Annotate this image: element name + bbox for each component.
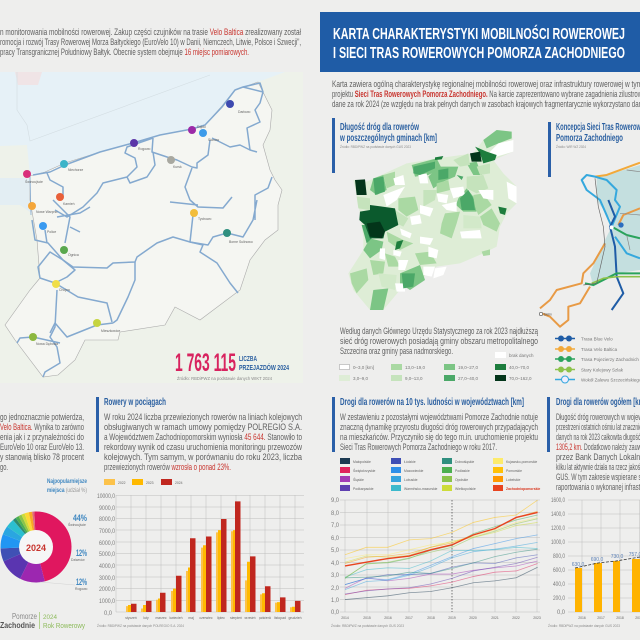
intro text: bicycle monitoring: romocja i rozwój Trasy Rowerowej Morza Bałtyckiego (EuroVelo 10) w Danii, Niemczech, Litwie, Polsce i Szwecji", xyxy=(0,37,301,47)
bar chart: bikes on trains by month: lipiec xyxy=(217,616,225,620)
choropleth legend: 40,0–70,0 xyxy=(509,365,530,370)
choropleth map xyxy=(348,130,517,310)
bar chart: bikes on trains by month: 1000,0 xyxy=(99,599,116,605)
logo: Pomorze Zachodnie 2024 Rok Rowerowy xyxy=(0,612,85,630)
bar chart: bikes on trains by month: październik xyxy=(259,616,271,620)
logo: Pomorze Zachodnie 2024 Rok Rowerowy: Zachodnie xyxy=(0,621,35,630)
line chart: voivodeships: 2020 xyxy=(469,616,477,620)
place labels: Sianów xyxy=(208,138,220,142)
place labels: Niechorze xyxy=(68,168,83,172)
bar chart: bikes on trains by month: grudzień xyxy=(288,616,302,620)
panel: paths per 10 thousand inhabitants: na mieszkańców. Przyczyniło się do tego m.in. uruchomienie projektu xyxy=(340,432,538,442)
place labels: Mieszkowice xyxy=(101,329,120,333)
place labels: Borne Sulinowo xyxy=(229,240,253,244)
line chart legend: Mazowieckie xyxy=(404,469,424,473)
intro text: bicycle monitoring: pracy Transgranicznej Południowy Bałtyk. Obecnie system obejmuje 16 miejsc pomiarowych. xyxy=(0,47,249,57)
donut chart: share by place: 12% xyxy=(76,548,87,558)
bar chart: bikes on trains by month: 2000,0 xyxy=(99,587,116,593)
bar chart: bikes on trains by month: marzec xyxy=(155,616,167,620)
sea xyxy=(0,72,285,176)
bar chart: total km by year: 730,0 xyxy=(611,554,623,560)
intro text: bicycle monitoring xyxy=(0,27,301,57)
place labels: Kursk xyxy=(173,165,182,169)
bar chart: total km by year: 1400,0 xyxy=(551,512,565,518)
panel: length of bicycle paths by municipality: w poszczególnych gminach [km] xyxy=(339,133,437,144)
donut chart: share by place: Świnoujście xyxy=(68,522,86,527)
statistic: number of passes: LICZBA xyxy=(239,356,257,363)
line chart legend: Zachodniopomorskie xyxy=(506,487,540,491)
bar chart: bikes on trains by month: listopad xyxy=(274,616,286,620)
bar chart: bikes on trains by month: Źródło: RBDiPWZ na podstawie danych POLREGIO S.A. 2024 xyxy=(97,623,184,628)
text block: most popular places: enia jak i z przynależności do xyxy=(0,432,84,442)
bar chart: total km by year xyxy=(548,498,640,628)
bar chart: bikes on trains by month: styczeń xyxy=(125,616,137,620)
chart legend: 2022 xyxy=(118,481,126,485)
text block: most popular places: Velo Baltica. Wynika to zarówno xyxy=(0,422,84,432)
chart legend: 2024 xyxy=(175,481,183,485)
place labels: Kamień xyxy=(63,202,75,206)
bar chart: total km by year: 2017 xyxy=(597,616,605,620)
intro text: bicycle monitoring: n monitorowania mobilności rowerowej. Zakup części czujników na trasie Velo Baltica zrealizowany został xyxy=(0,27,301,37)
choropleth legend: 27,0–40,0 xyxy=(458,376,479,381)
chart legend: 2023 xyxy=(146,481,154,485)
counter markers xyxy=(23,100,234,341)
region land xyxy=(5,82,282,377)
panel: total bicycle paths xyxy=(547,397,640,492)
panel: paths per 10 thousand inhabitants xyxy=(332,397,538,452)
choropleth legend: 70,0–162,0 xyxy=(509,376,532,381)
line chart: voivodeships: 2,0 xyxy=(331,586,340,592)
line chart legend: Świętokrzyskie xyxy=(353,468,376,473)
text: statistics note: sieć dróg rowerowych posiadają gminy obszaru metropolitalnego xyxy=(340,336,538,346)
line chart: voivodeships: 2022 xyxy=(512,616,520,620)
bar chart: bikes on trains by month: wrzesień xyxy=(244,616,256,620)
bar chart: total km by year: 1600,0 xyxy=(551,498,565,504)
line chart: voivodeships: 7,0 xyxy=(331,523,340,529)
line chart legend: Dolnośląskie xyxy=(455,460,474,464)
line chart: voivodeships: 0,0 xyxy=(331,610,340,616)
donut chart: share by place: 12% xyxy=(76,577,87,587)
bar chart: bikes on trains by month: 5000,0 xyxy=(99,552,116,558)
route network map: Bielin xyxy=(544,313,552,317)
panel: bikes on trains: obsługiwanych w ramach umowy pomiędzy POLREGIO S.A. xyxy=(104,422,302,432)
place labels: Darłowo xyxy=(238,110,251,114)
line chart legend: Śląskie xyxy=(353,477,364,482)
line chart legend: Podkarpackie xyxy=(353,487,374,491)
text block: most popular places: EuroVelo 10 oraz EuroVelo 13. xyxy=(0,442,84,452)
bar chart: total km by year: Źródło: RBDiPWZ na podstawie danych GUS 2023 xyxy=(548,623,620,628)
text block: most popular places xyxy=(0,412,84,472)
panel: length of bicycle paths by municipality: Długość dróg dla rowerów xyxy=(340,122,419,133)
panel: paths per 10 thousand inhabitants: Drogi dla rowerów na 10 tys. ludności w województwach [km] xyxy=(340,397,524,408)
text block: most popular places: go. xyxy=(0,462,8,472)
donut chart: share by place: miejsca (udział %) xyxy=(47,488,87,494)
header banner xyxy=(320,12,640,72)
text block: most popular places: y stanowią blisko 78 procent xyxy=(0,452,84,462)
choropleth legend: 9,0–13,0 xyxy=(405,376,423,381)
choropleth legend: 0–3,0 [km] xyxy=(353,365,374,370)
panel: bikes on trains: Rowery w pociągach xyxy=(104,397,166,408)
choropleth legend: 19,0–27,0 xyxy=(458,365,479,370)
line chart: voivodeships: 2021 xyxy=(491,616,499,620)
line chart: voivodeships: 5,0 xyxy=(331,548,340,554)
bar chart: total km by year: 800,0 xyxy=(553,554,566,560)
line chart: voivodeships: 2016 xyxy=(384,616,392,620)
donut chart: share by place xyxy=(9,479,88,591)
route legend: Stary Kolejowy Szlak xyxy=(581,368,624,372)
bar chart: total km by year: 200,0 xyxy=(553,596,566,602)
text: statistics note xyxy=(340,326,538,356)
line chart: voivodeships xyxy=(331,458,541,628)
bar chart: total km by year: 630,0 xyxy=(572,562,584,568)
line chart: voivodeships: 2023 xyxy=(533,616,541,620)
bar chart: bikes on trains by month: 8000,0 xyxy=(99,517,116,523)
donut chart: share by place: Dziwnów xyxy=(71,558,85,562)
bar chart: total km by year: 2018 xyxy=(616,616,624,620)
place labels: Świnoujście xyxy=(25,179,43,184)
routes xyxy=(17,83,272,377)
bar chart: bikes on trains by month: sierpień xyxy=(230,616,242,620)
route legend xyxy=(555,336,640,383)
bar chart: bikes on trains by month: 9000,0 xyxy=(99,506,116,512)
route network map xyxy=(539,163,640,327)
bar chart: total km by year: 0,0 xyxy=(557,610,566,616)
statistic: number of passes: 1 763 115 xyxy=(175,349,236,377)
bar chart: total km by year: 2016 xyxy=(578,616,586,620)
line chart legend: Lubuskie xyxy=(404,478,418,482)
panel: bikes on trains: W roku 2024 liczba przewiezionych rowerów na liniach kolejowych xyxy=(104,412,302,422)
place labels xyxy=(25,110,253,346)
place labels: Tychowo xyxy=(198,217,211,221)
line chart legend: Opolskie xyxy=(455,478,468,482)
line chart: voivodeships: 4,0 xyxy=(331,561,340,567)
line chart legend: Małopolskie xyxy=(353,460,371,464)
bar chart: total km by year: 600,0 xyxy=(553,568,566,574)
bar chart: bikes on trains by month: luty xyxy=(143,616,149,620)
place labels: Police xyxy=(47,230,56,234)
choropleth legend xyxy=(339,352,534,381)
bar chart: bikes on trains by month xyxy=(97,479,304,628)
line chart legend: Pomorskie xyxy=(506,469,522,473)
intro text: map description xyxy=(332,79,640,109)
place labels: Nowe Warpno xyxy=(36,210,57,214)
route legend: Trasa Pojezierzy Zachodnich xyxy=(581,357,639,362)
line chart: voivodeships: 2018 xyxy=(427,616,435,620)
line chart: voivodeships: 9,0 xyxy=(331,498,340,504)
bar chart: total km by year: 1000,0 xyxy=(551,540,565,546)
bar chart: bikes on trains by month: 0,0 xyxy=(104,611,113,617)
panel: concept of the route network: Źródło: WIR WZ 2024 xyxy=(556,144,586,149)
line chart legend: Warmińsko-mazurskie xyxy=(404,487,438,491)
bar chart: bikes on trains by month: 3000,0 xyxy=(99,576,116,582)
line chart: voivodeships: Źródło: RBDiPWZ na podstawie danych GUS 2023 xyxy=(331,623,404,628)
line chart: voivodeships: 6,0 xyxy=(331,536,340,542)
bar chart: bikes on trains by month: kwiecień xyxy=(169,616,183,620)
bar chart: total km by year: 690,0 xyxy=(591,557,603,563)
bar chart: total km by year: 1200,0 xyxy=(551,526,565,532)
text block: most popular places: go jednoznacznie potwierdza, xyxy=(0,412,84,422)
panel: bikes on trains: przewiezionych rowerów wzrosła o ponad 23%. xyxy=(104,462,231,472)
panel: bikes on trains: kolejowych. Tym samym, w porównaniu do roku 2023, liczba xyxy=(104,452,302,462)
panel: bikes on trains: a Województwem Zachodniopomorskim wyniosła 45 644. Stanowiło to xyxy=(104,432,302,442)
panel: bikes on trains: rekordowy wynik od czasu uruchomienia monitoringu przewozów xyxy=(104,442,302,452)
line chart legend xyxy=(340,458,540,491)
logo: Pomorze Zachodnie 2024 Rok Rowerowy: Pomorze xyxy=(12,612,37,621)
place labels: Ognica xyxy=(68,253,79,257)
text: statistics note: Szczecina oraz gminy pasa nadmorskiego. xyxy=(340,346,453,356)
line chart legend: Lubelskie xyxy=(506,478,520,482)
panel: paths per 10 thousand inhabitants: znaczną dynamikę przyrostu długości dróg rowerowych przypadających xyxy=(340,422,538,432)
line chart: voivodeships: 2015 xyxy=(363,616,371,620)
donut chart: share by place: Rogowo xyxy=(75,587,88,591)
place labels: Nowa Dębowa xyxy=(36,342,58,346)
chart legend xyxy=(104,479,183,485)
line chart: voivodeships: 3,0 xyxy=(331,573,340,579)
line chart legend: Łódzkie xyxy=(404,460,416,464)
statistic: number of passes: PRZEJAZDÓW 2024 xyxy=(239,363,289,372)
panel: paths per 10 thousand inhabitants: W zestawieniu z pozostałymi województwami Pomorze Zachodnie notuje xyxy=(340,412,538,422)
bar chart: bikes on trains by month: 6000,0 xyxy=(99,541,116,547)
place labels: Chojna xyxy=(59,288,70,292)
route legend: Trasa Velo Baltica xyxy=(581,347,618,352)
donut chart: share by place: Najpopularniejsze xyxy=(47,479,88,485)
line chart legend: Podlaskie xyxy=(455,469,470,473)
text: statistics note: Według danych Głównego Urzędu Statystycznego za rok 2023 najdłuższą xyxy=(340,326,538,336)
logo: Pomorze Zachodnie 2024 Rok Rowerowy: 2024 xyxy=(43,614,57,621)
bar chart: bikes on trains by month: czerwiec xyxy=(199,616,213,620)
line chart: voivodeships: 1,0 xyxy=(331,598,340,604)
line chart legend: Wielkopolskie xyxy=(455,487,476,491)
line chart: voivodeships: 2019 xyxy=(448,616,456,620)
choropleth legend: 13,0–19,0 xyxy=(405,365,426,370)
panel: length of bicycle paths by municipality: Źródło: RBDiPWZ na podstawie danych GUS 2023 xyxy=(340,144,411,149)
place labels: Rogowo xyxy=(138,147,151,151)
line chart legend: Kujawsko-pomorskie xyxy=(506,460,537,464)
bar chart: bikes on trains by month: 4000,0 xyxy=(99,564,116,570)
choropleth legend: 3,0–9,0 xyxy=(353,376,369,381)
line chart: voivodeships: 2014 xyxy=(341,616,349,620)
donut chart: share by place: 44% xyxy=(73,513,87,523)
bar chart: bikes on trains by month: 7000,0 xyxy=(99,529,116,535)
panel: paths per 10 thousand inhabitants: Sieci Tras Rowerowych Pomorza Zachodniego w roku 2017. xyxy=(340,442,497,452)
route legend: Wokół Zalewu Szczecińskiego xyxy=(581,378,640,382)
map: bicycle counters and routes xyxy=(0,72,303,383)
line chart: voivodeships: 8,0 xyxy=(331,511,340,517)
line chart: voivodeships: 2017 xyxy=(405,616,413,620)
donut chart: share by place: 2024 xyxy=(26,543,46,553)
statistic: number of passes: Źródło: RBDiPWZ na podstawie danych WIKT 2024 xyxy=(177,375,272,381)
panel: bikes on trains xyxy=(96,397,302,472)
panel: concept of the route network xyxy=(539,122,640,383)
bar chart: total km by year: 400,0 xyxy=(553,582,566,588)
choropleth legend: brak danych xyxy=(509,353,534,358)
bar chart: bikes on trains by month: 10000,0 xyxy=(97,494,116,500)
logo: Pomorze Zachodnie 2024 Rok Rowerowy: Rok Rowerowy xyxy=(43,623,85,630)
route legend: Trasa Blue Velo xyxy=(581,336,613,342)
place labels: Dąbki xyxy=(197,125,206,129)
panel: length of bicycle paths by municipality xyxy=(332,118,538,381)
bar chart: bikes on trains by month: maj xyxy=(188,616,194,620)
